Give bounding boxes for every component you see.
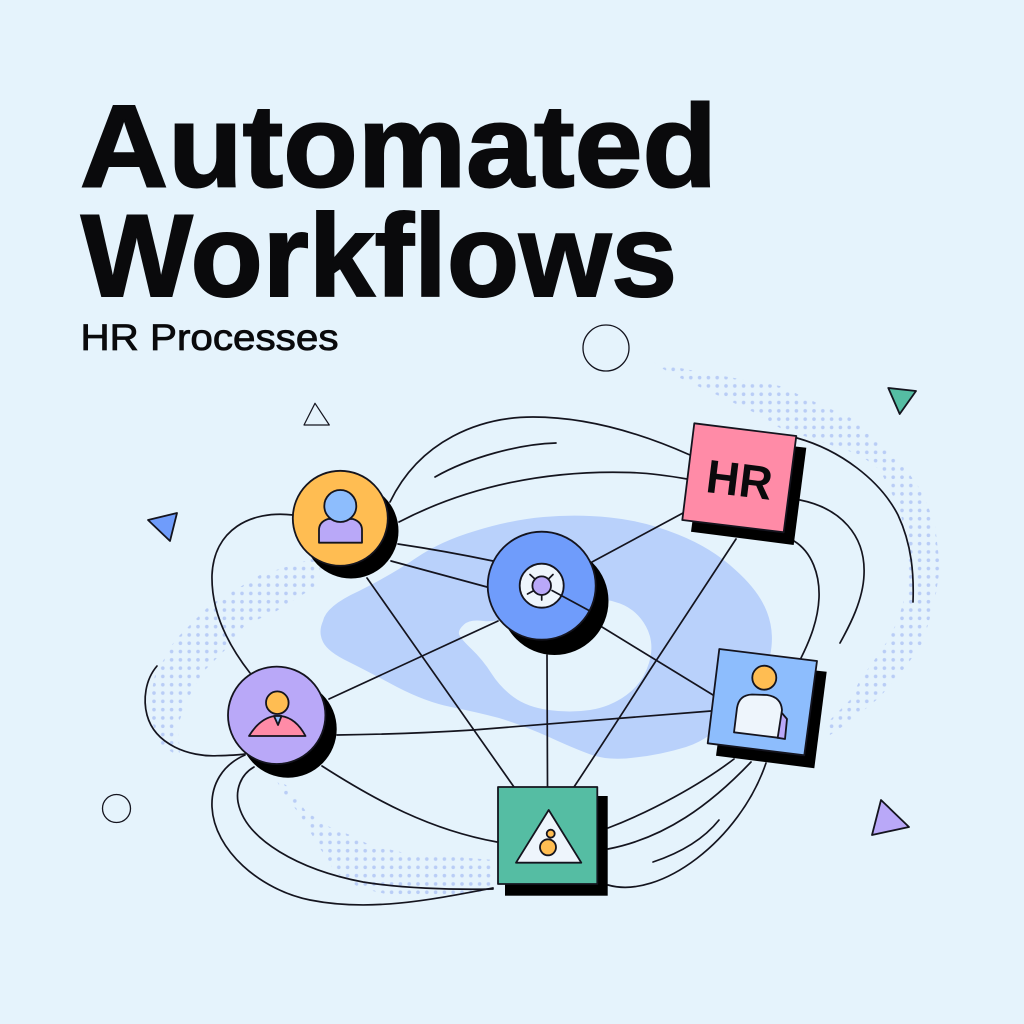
gear hub [520, 564, 564, 608]
large dot [540, 839, 556, 855]
small dot [547, 830, 555, 838]
dotted swirl band: left [148, 556, 322, 757]
hub spokes [528, 574, 589, 610]
collar [274, 716, 282, 725]
hub centre [532, 576, 551, 595]
decorative circle: top [583, 325, 629, 371]
title: Workflows [81, 190, 677, 321]
person head [266, 691, 289, 714]
title: Automated [80, 80, 717, 211]
person shoulders [249, 716, 306, 736]
person head [324, 490, 356, 522]
central blue blob [320, 516, 772, 759]
person body [734, 694, 782, 738]
decorative triangle: outline [304, 403, 329, 425]
decorative triangle: lavender [872, 800, 909, 835]
subtitle: HR Processes [80, 317, 338, 358]
decorative triangle: blue [148, 513, 177, 541]
dotted swirl band: bottom [276, 780, 494, 896]
node: central blue gear circle [488, 532, 608, 655]
person head [752, 666, 776, 690]
connector lines between nodes [145, 417, 913, 905]
dotted swirl band: upper right [650, 362, 940, 735]
node: light blue person card [708, 649, 827, 768]
node: green triangle card [498, 787, 608, 896]
decorative circle: bottom left [102, 794, 130, 822]
triangle icon [516, 810, 581, 863]
node: pink HR card [682, 423, 806, 545]
person body [319, 519, 362, 543]
HR label: HR [704, 449, 775, 510]
title [80, 80, 717, 321]
node: purple person circle [228, 667, 337, 778]
person back layer [777, 712, 787, 739]
node: orange person circle [293, 471, 398, 578]
decorative triangle: green [888, 388, 916, 414]
